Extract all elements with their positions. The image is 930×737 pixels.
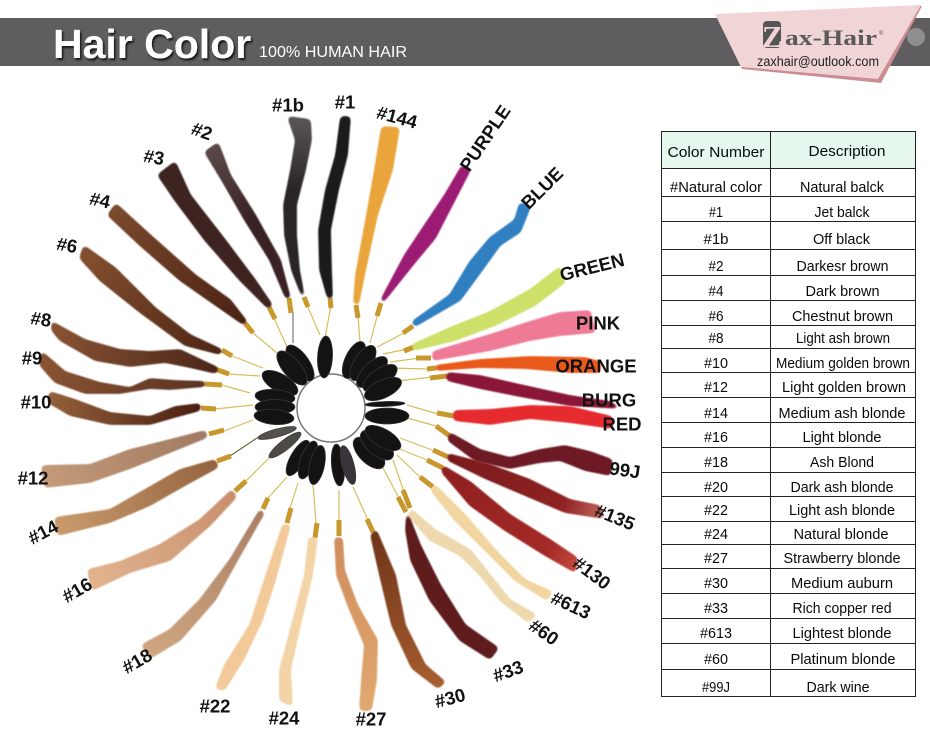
- table rows: Medium golden brown: [776, 356, 910, 372]
- table rows: #33: [704, 601, 728, 617]
- table rows: #8: [708, 331, 724, 347]
- strand: #60: #60: [525, 615, 563, 649]
- strand: green: [383, 249, 626, 354]
- strand: #1b: [272, 94, 320, 335]
- strand: purple: [370, 101, 515, 343]
- strand: pink: PINK: [576, 312, 621, 334]
- table grid: [661, 131, 916, 697]
- strand: #12: [18, 420, 253, 488]
- table rows: Natural blonde: [794, 527, 888, 543]
- strand: #22: #22: [200, 696, 230, 716]
- decorative circle: [907, 28, 925, 46]
- table rows: Medium ash blonde: [778, 406, 906, 422]
- strand: #16: #16: [58, 573, 96, 607]
- table rows: Light ash brown: [796, 331, 890, 347]
- strand: blue: [377, 163, 567, 347]
- strand: #135: #135: [592, 500, 638, 534]
- strand: #30: [353, 487, 468, 712]
- table rows: Dark wine: [806, 680, 870, 696]
- strand: #144: #144: [374, 102, 420, 133]
- table rows: #22: [704, 503, 728, 519]
- strand: #6: #6: [55, 233, 79, 257]
- table rows: #Natural color: [670, 180, 762, 196]
- strand: #33: #33: [490, 656, 526, 686]
- logo badge: ®: [879, 30, 884, 37]
- strand: #613: #613: [548, 587, 594, 623]
- table rows: #1b: [704, 232, 728, 248]
- table rows: #99J: [702, 680, 730, 696]
- table rows: #14: [704, 406, 728, 422]
- strand: #60: [393, 460, 563, 649]
- table rows: Platinum blonde: [790, 652, 896, 668]
- table rows: Dark brown: [806, 284, 880, 300]
- strand: #4: [88, 188, 277, 353]
- strand: #135: [400, 438, 638, 534]
- strand: burg: [398, 373, 636, 410]
- strand: 99J: 99J: [608, 457, 642, 483]
- strand: #3: #3: [142, 145, 166, 169]
- strand: #2: [189, 118, 293, 343]
- logo badge: ax-Hair: [785, 25, 877, 50]
- strand: #1: #1: [335, 92, 355, 112]
- table rows: Dark ash blonde: [790, 480, 894, 496]
- strand: #24: [269, 485, 317, 728]
- table rows: Light blonde: [802, 430, 882, 446]
- table rows: Medium auburn: [791, 576, 893, 592]
- table rows: #18: [704, 455, 728, 471]
- hair colour ring: [18, 92, 642, 730]
- strand: #12: #12: [18, 468, 48, 488]
- table rows: #613: [700, 626, 732, 642]
- table rows: Lightest blonde: [792, 626, 892, 642]
- strand: purple: PURPLE: [455, 101, 515, 175]
- table rows: Darkesr brown: [796, 259, 888, 275]
- ring: [297, 374, 365, 442]
- table rows: Natural balck: [800, 180, 885, 196]
- strand: #10: [21, 392, 253, 424]
- strand: #18: #18: [118, 644, 156, 678]
- table header text: [668, 144, 886, 161]
- strand: #6: [55, 233, 263, 368]
- table header text: Description: [808, 144, 886, 160]
- strand: #4: #4: [88, 188, 113, 213]
- strand: #8: [29, 307, 260, 376]
- strand: #27: #27: [356, 708, 386, 730]
- logo badge: [715, 5, 922, 83]
- strand: #16: [58, 457, 270, 607]
- table rows: Ash Blond: [810, 455, 874, 471]
- table rows: Jet balck: [814, 205, 870, 221]
- strand: 99J: [407, 418, 642, 483]
- strand: #30: #30: [432, 684, 468, 712]
- strand: #9: [22, 348, 250, 393]
- strand: #130: #130: [569, 552, 615, 594]
- strand: #144: [354, 102, 420, 342]
- table rows: Light golden brown: [782, 380, 906, 396]
- table rows: Chestnut brown: [792, 309, 893, 325]
- colour table: [661, 131, 916, 697]
- table rows: #10: [704, 356, 728, 372]
- table rows: #24: [704, 527, 728, 543]
- table rows: Off black: [813, 232, 871, 248]
- table rows: #27: [704, 551, 728, 567]
- table rows: #1: [709, 205, 723, 221]
- logo badge: Z: [762, 19, 783, 54]
- table rows: #6: [708, 309, 724, 325]
- table header text: Color Number: [668, 145, 765, 161]
- strand: #613: [397, 455, 594, 623]
- strand: #1b: #1b: [272, 94, 304, 116]
- strand: #1: [319, 92, 355, 338]
- table rows: #2: [708, 259, 724, 275]
- logo badge: zaxhair@outlook.com: [757, 54, 879, 69]
- strand: #14: #14: [24, 515, 62, 549]
- table rows: Strawberry blonde: [784, 551, 900, 567]
- strand: #24: #24: [269, 708, 300, 728]
- strand: orange: [390, 356, 637, 376]
- table rows: #60: [704, 652, 728, 668]
- strand: #22: [200, 483, 298, 716]
- title: Hair Color: [53, 21, 251, 67]
- table rows: #12: [704, 380, 728, 396]
- strand: red: RED: [602, 414, 642, 434]
- table rows: [670, 180, 910, 696]
- black colour tabs: [253, 336, 409, 486]
- strand: orange: ORANGE: [555, 356, 637, 376]
- strand: #10: #10: [21, 392, 51, 412]
- strand: #3: [142, 145, 287, 347]
- table rows: #16: [704, 430, 728, 446]
- strand: #130: [397, 448, 615, 594]
- table rows: #20: [704, 480, 728, 496]
- table header background: [661, 131, 916, 168]
- strand: #9: #9: [22, 348, 42, 368]
- strand: #18: [118, 477, 287, 678]
- strand: #33: [383, 468, 526, 686]
- strand: green: GREEN: [558, 249, 626, 285]
- strand: blue: BLUE: [517, 163, 567, 213]
- table rows: #4: [708, 284, 724, 300]
- strand: #2: #2: [189, 118, 215, 144]
- strand: red: [407, 405, 642, 434]
- header band: [0, 18, 930, 67]
- strand: #8: #8: [29, 307, 53, 331]
- subtitle: 100% HUMAN HAIR: [259, 44, 407, 61]
- table rows: Light ash blonde: [789, 503, 895, 519]
- table rows: #30: [704, 576, 728, 592]
- table rows: Rich copper red: [792, 601, 892, 617]
- strand: burg: BURG: [582, 390, 636, 410]
- strand: #27: [335, 490, 386, 730]
- strand: #14: [24, 438, 257, 549]
- strand: pink: [390, 311, 621, 362]
